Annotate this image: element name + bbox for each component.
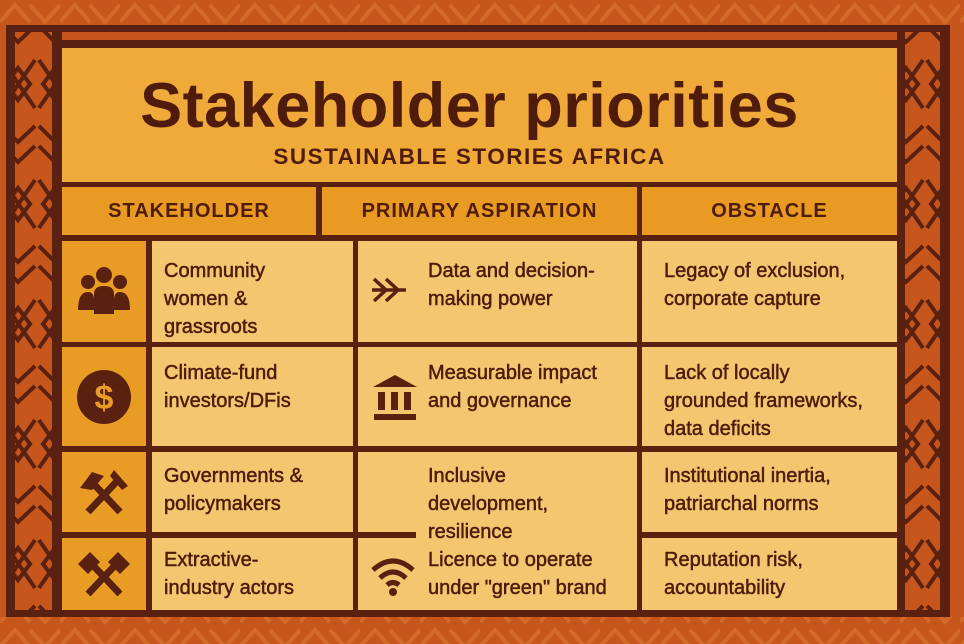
stakeholder 1 — [152, 241, 353, 342]
stakeholder 4 — [152, 538, 353, 610]
aspiration 3-4: under "green" brand — [428, 577, 607, 599]
icon: dollar — [62, 347, 146, 446]
stakeholder 4: industry actors — [164, 577, 294, 599]
icon: arrow — [372, 278, 406, 302]
obstacle 1 — [642, 241, 897, 342]
aspiration 2 — [358, 347, 637, 446]
aspiration 3-4: development, — [428, 493, 548, 515]
stakeholder 2 — [152, 347, 353, 446]
aspiration 1: Data and decision- — [428, 260, 595, 282]
obstacle 1: Legacy of exclusion, — [664, 260, 845, 282]
icon: hammers — [62, 452, 146, 532]
aspiration 3-4: resilience — [428, 521, 512, 543]
obstacle 3: patriarchal norms — [664, 493, 819, 515]
obstacle 4: Reputation risk, — [664, 549, 803, 571]
obstacle 1: corporate capture — [664, 288, 821, 310]
aspiration 1: making power — [428, 288, 553, 310]
stakeholder 1: women & — [164, 288, 247, 310]
obstacle 3: Institutional inertia, — [664, 465, 831, 487]
aspiration 2: Measurable impact — [428, 362, 597, 384]
stakeholder 2: investors/DFis — [164, 390, 291, 412]
aspiration 3-4: Inclusive — [428, 465, 506, 487]
obstacle 4: accountability — [664, 577, 785, 599]
header: obstacle — [642, 187, 897, 235]
aspiration 1 — [358, 241, 637, 342]
aspiration 2: and governance — [428, 390, 571, 412]
stakeholder 2: Climate-fund — [164, 362, 277, 384]
obstacle 2: data deficits — [664, 418, 771, 440]
title panel — [62, 48, 897, 182]
icon: wifi — [371, 558, 415, 596]
subtitle: SUSTAINABLE STORIES AFRICA — [273, 144, 666, 169]
icon: bank — [373, 375, 417, 420]
obstacle 2 — [642, 347, 897, 446]
header: stakeholder: STAKEHOLDER — [108, 200, 270, 222]
stakeholder 4: Extractive- — [164, 549, 258, 571]
obstacle 2: Lack of locally — [664, 362, 790, 384]
title: Stakeholder priorities — [140, 71, 799, 141]
icon: people — [62, 241, 146, 342]
stakeholder 1: Community — [164, 260, 265, 282]
obstacle 2: grounded frameworks, — [664, 390, 863, 412]
stakeholder 3: Governments & — [164, 465, 303, 487]
header: stakeholder — [62, 187, 316, 235]
header: aspiration: PRIMARY ASPIRATION — [362, 200, 597, 222]
stakeholder 1: grassroots — [164, 316, 257, 338]
header: aspiration — [322, 187, 637, 235]
aspiration 3-4: Licence to operate — [428, 549, 593, 571]
stakeholder 3 — [152, 452, 353, 532]
stakeholder 3: policymakers — [164, 493, 281, 515]
icon: dollar: $ — [95, 378, 114, 416]
obstacle 3 — [642, 452, 897, 532]
header: obstacle: OBSTACLE — [711, 200, 828, 222]
aspiration 3-4 — [358, 452, 637, 610]
icon: pickaxes — [62, 538, 146, 610]
obstacle 4 — [642, 538, 897, 610]
